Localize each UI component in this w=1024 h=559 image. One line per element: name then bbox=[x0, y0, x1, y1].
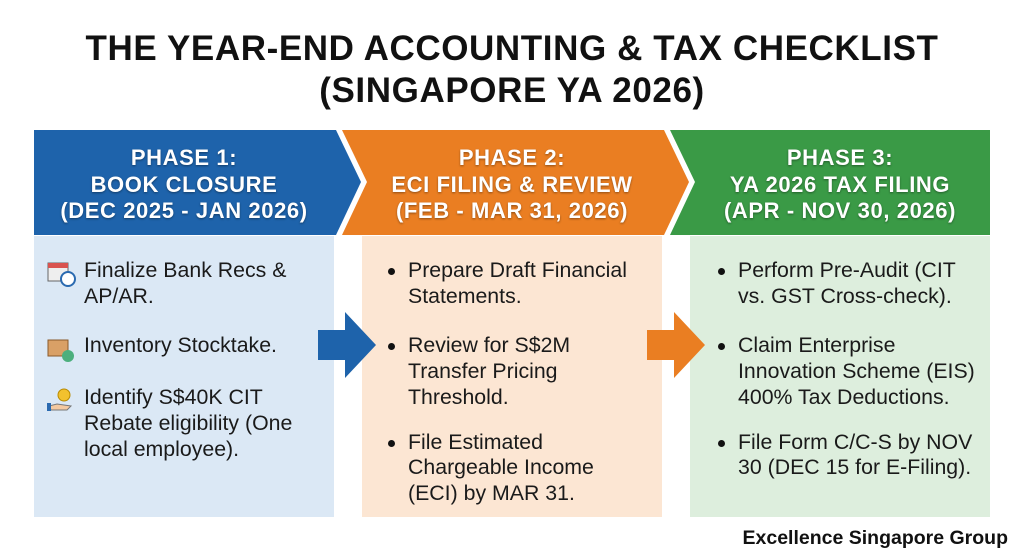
heading: phase 3 bbox=[724, 145, 956, 224]
text: phase 2 items: File Estimated bbox=[408, 430, 543, 454]
heading: phase 3: PHASE 3: bbox=[787, 145, 893, 170]
title: THE YEAR-END ACCOUNTING & TAX CHECKLIST bbox=[85, 29, 939, 68]
text: phase 2 items: Transfer Pricing bbox=[408, 359, 558, 383]
text: phase 1 items: Identify S$40K CIT bbox=[84, 385, 263, 409]
text: phase 1 items bbox=[84, 258, 292, 461]
panel: phase 3 body bbox=[690, 236, 990, 517]
heading: phase 2: ECI FILING & REVIEW bbox=[391, 172, 633, 196]
text: phase 1 items: AP/AR. bbox=[84, 284, 154, 308]
heading: phase 1: BOOK CLOSURE bbox=[91, 172, 277, 196]
panel: phase 1 body bbox=[34, 236, 334, 517]
arrow: phase 2 to 3 bbox=[647, 312, 705, 378]
text: phase 1 items: Rebate eligibility (One bbox=[84, 411, 292, 435]
text: phase 3 items: Innovation Scheme (EIS) bbox=[738, 359, 975, 383]
heading: phase 1 bbox=[60, 145, 308, 224]
text: phase 2 items: (ECI) by MAR 31. bbox=[408, 481, 575, 505]
text: phase 3 items: Perform Pre-Audit (CIT bbox=[738, 258, 956, 282]
footer credit: Excellence Singapore Group bbox=[742, 527, 1008, 549]
text: phase 3 items: Claim Enterprise bbox=[738, 333, 895, 357]
text: phase 2 items: Threshold. bbox=[408, 385, 509, 409]
chevron: phase 3 bbox=[670, 130, 990, 235]
text: phase 3 items: File Form C/C-S by NOV bbox=[738, 430, 972, 454]
heading: phase 2: PHASE 2: bbox=[459, 145, 565, 170]
text: phase 3 items bbox=[718, 258, 975, 479]
heading: phase 3: YA 2026 TAX FILING bbox=[730, 172, 950, 196]
text: phase 3 items: 400% Tax Deductions. bbox=[738, 385, 950, 409]
heading: phase 1: (DEC 2025 - JAN 2026) bbox=[60, 198, 308, 223]
chevron: phase 1 bbox=[34, 130, 361, 235]
text: phase 3 items: 30 (DEC 15 for E-Filing). bbox=[738, 455, 971, 479]
text: phase 2 items: Prepare Draft Financial bbox=[408, 258, 627, 282]
icon: box bbox=[48, 340, 74, 362]
arrow: phase 1 to 2 bbox=[318, 312, 376, 378]
text: phase 2 items: Review for S$2M bbox=[408, 333, 570, 357]
text: phase 2 items: Chargeable Income bbox=[408, 455, 594, 479]
text: phase 2 items: Statements. bbox=[408, 284, 522, 308]
text: phase 1 items: local employee). bbox=[84, 437, 239, 461]
title bbox=[85, 29, 939, 110]
title: (SINGAPORE YA 2026) bbox=[319, 71, 705, 110]
chevron: phase 2 bbox=[342, 130, 689, 235]
text: phase 3 items: vs. GST Cross-check). bbox=[738, 284, 952, 308]
panel: phase 2 body bbox=[362, 236, 662, 517]
heading: phase 2 bbox=[391, 145, 633, 225]
icon: calendar bbox=[48, 262, 76, 287]
heading: phase 3: (APR - NOV 30, 2026) bbox=[724, 198, 956, 223]
icon: coin hand bbox=[47, 388, 72, 411]
text: phase 2 items bbox=[388, 258, 627, 505]
text: phase 1 items: Inventory Stocktake. bbox=[84, 333, 277, 357]
heading: phase 2: (FEB - MAR 31, 2026) bbox=[396, 198, 628, 223]
heading: phase 1: PHASE 1: bbox=[131, 145, 237, 170]
text: phase 1 items: Finalize Bank Recs & bbox=[84, 258, 286, 282]
